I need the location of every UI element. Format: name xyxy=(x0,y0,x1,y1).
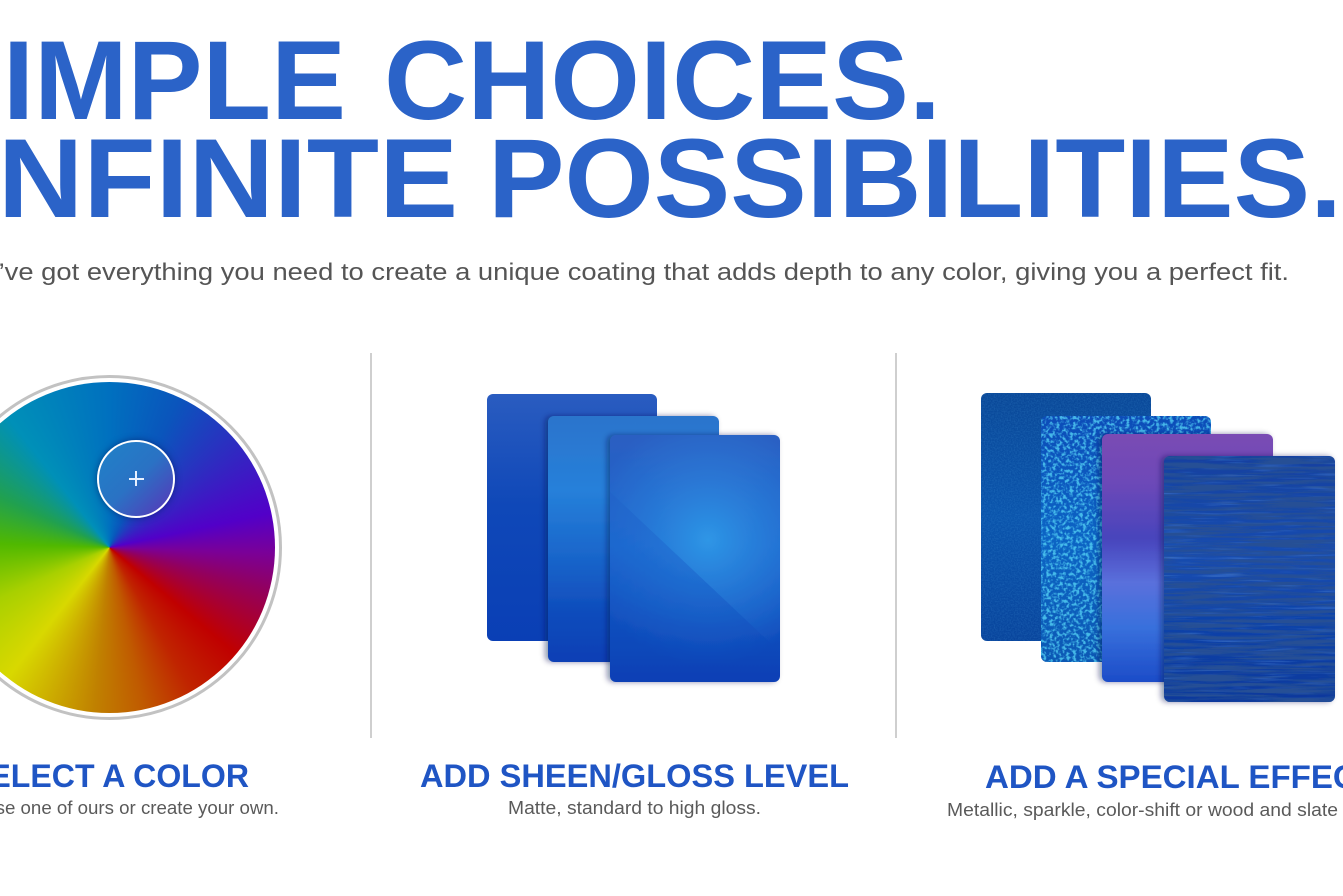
card: metallic xyxy=(981,393,1151,641)
heading: sheen: ADD SHEEN/GLOSS LEVEL xyxy=(420,758,849,794)
card: standard xyxy=(548,416,719,662)
panel: gloss cards xyxy=(487,394,780,682)
card: matte xyxy=(487,394,657,641)
title: CHOICES. xyxy=(384,18,941,143)
panel: special effect cards xyxy=(981,393,1335,702)
icon: color wheel xyxy=(0,374,282,720)
title xyxy=(0,18,1342,241)
card: wood grain xyxy=(1164,456,1335,702)
text: sheen: Matte, standard to high gloss. xyxy=(508,798,761,818)
icon: color picker loupe xyxy=(97,440,175,518)
title: POSSIBILITIES. xyxy=(488,116,1342,241)
divider left xyxy=(370,353,372,738)
text: special effect: Metallic, sparkle, color-shift or wood and slate xyxy=(947,800,1338,820)
color wheel disc xyxy=(0,382,275,712)
divider right xyxy=(895,353,897,738)
card: high gloss xyxy=(610,435,780,682)
card: color shift xyxy=(1102,434,1273,682)
card: sparkle xyxy=(1041,416,1211,662)
